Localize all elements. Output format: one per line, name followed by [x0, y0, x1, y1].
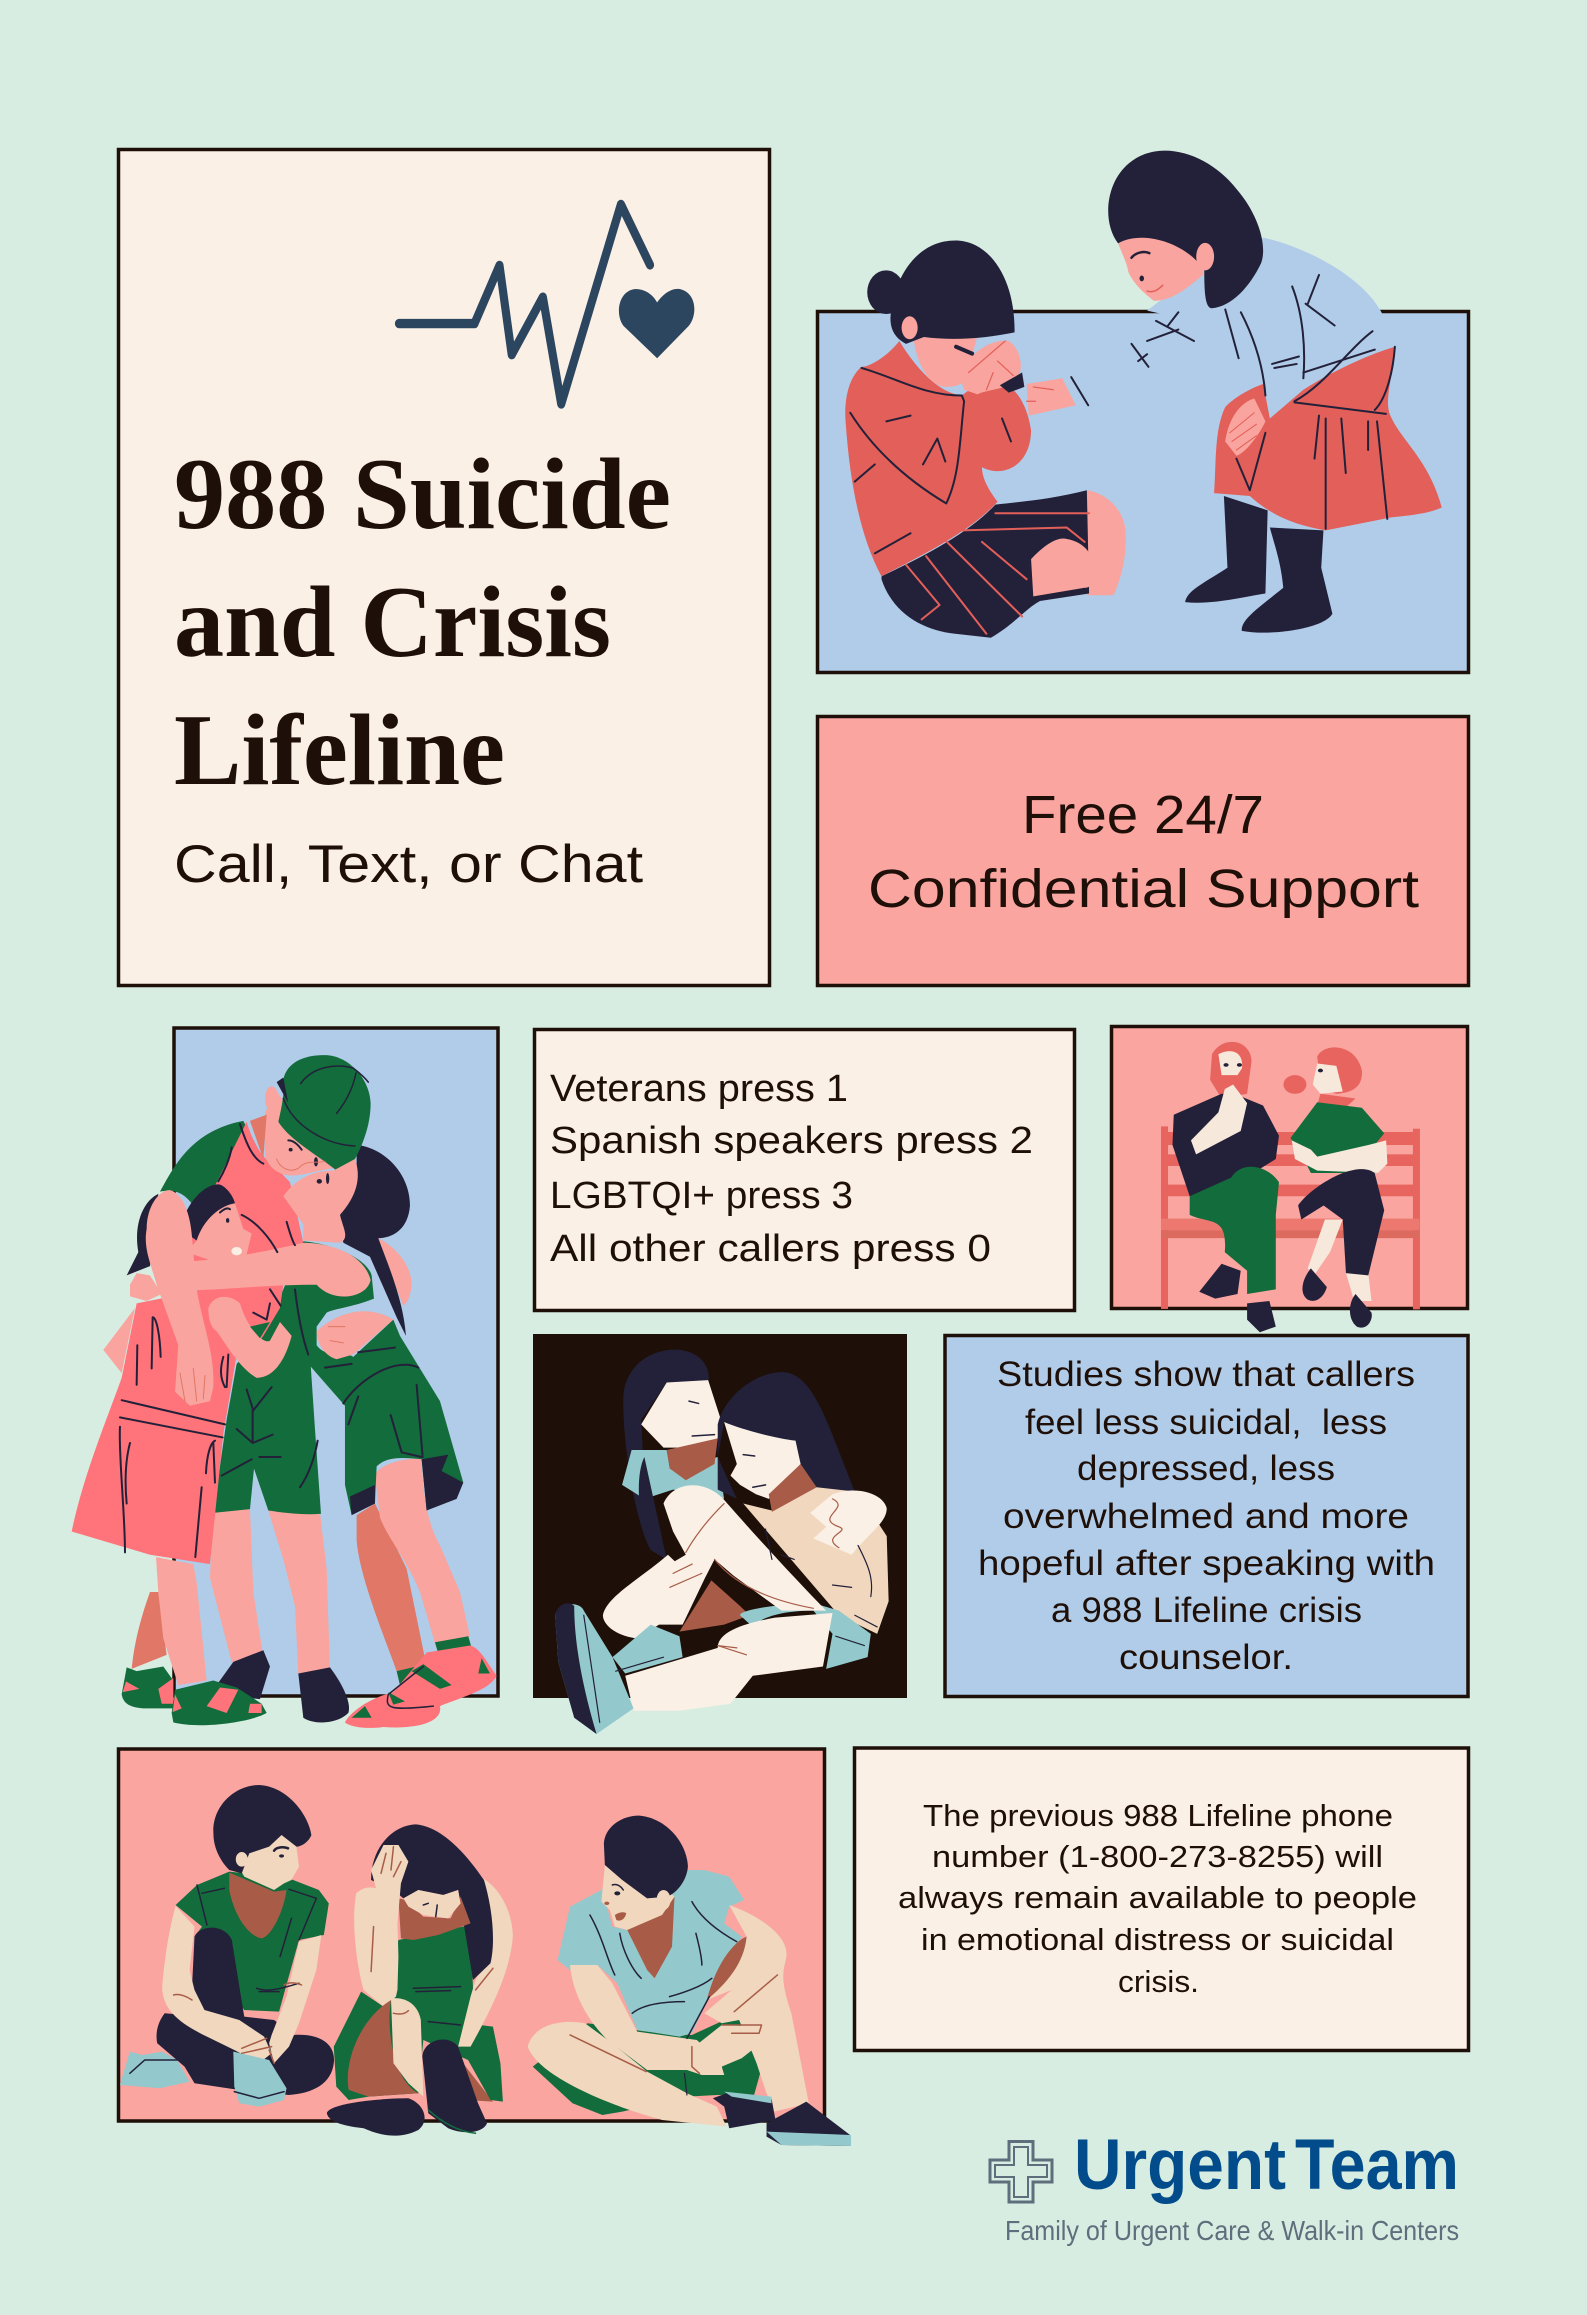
- icon: heartbeat line with heart: [399, 204, 694, 404]
- subtitle: Call, Text, or Chat: [174, 835, 643, 894]
- logo: Urgent Team: [990, 2126, 1459, 2246]
- panel: previous number note: number (1-800-273-8255) will: [932, 1839, 1383, 1874]
- figure: standing girl: [1108, 151, 1442, 633]
- panel: blue illustration backdrop: [818, 312, 1468, 672]
- panel: studies text: hopeful after speaking with: [978, 1544, 1435, 1583]
- kid: left: [120, 1785, 334, 2107]
- illustration: girl comforting crying girl: [845, 151, 1442, 638]
- panel: previous number note: in emotional distress or suicidal: [921, 1922, 1394, 1957]
- panel: free confidential support: [818, 716, 1468, 986]
- woman: [1283, 1047, 1387, 1328]
- title: [174, 438, 671, 807]
- panel: studies text: a 988 Lifeline crisis: [1051, 1591, 1362, 1630]
- panel: studies text: depressed, less: [1077, 1449, 1335, 1488]
- panel: pink bench backdrop: [1112, 1026, 1468, 1308]
- panel: free confidential support: Free 24/7: [1022, 785, 1264, 845]
- illustration: three people hugging: [72, 1055, 497, 1728]
- illustration: two girls embracing: [555, 1350, 889, 1734]
- illustration: couple on bench: [1161, 1042, 1420, 1332]
- logo wordmark: Team: [1295, 2126, 1459, 2205]
- panel: press options: Spanish speakers press 2: [550, 1120, 1033, 1162]
- title: Lifeline: [174, 694, 505, 807]
- panel: press options: [534, 1030, 1074, 1310]
- sandal: pink: [345, 1646, 497, 1728]
- panel: studies text: counselor.: [1119, 1638, 1293, 1677]
- panel: press options: All other callers press 0: [550, 1228, 991, 1270]
- panel: pink backdrop for sitting kids: [118, 1749, 824, 2121]
- panel: tall blue backdrop: [174, 1028, 498, 1696]
- panel: previous number note: The previous 988 Lifeline phone: [923, 1798, 1393, 1833]
- panel: studies text: [945, 1336, 1468, 1696]
- kid: middle: [327, 1824, 513, 2136]
- green dress: [283, 1241, 463, 1515]
- panel: previous number note: [854, 1748, 1468, 2050]
- man: [1172, 1042, 1279, 1332]
- figure: crying girl: [845, 241, 1126, 638]
- bench: [1161, 1126, 1420, 1309]
- panel: studies text: feel less suicidal, less: [1025, 1403, 1387, 1442]
- title: and Crisis: [174, 566, 611, 679]
- panel: title card: [118, 150, 770, 986]
- logo tagline: Family of Urgent Care & Walk-in Centers: [1005, 2215, 1459, 2246]
- panel: press options: LGBTQI+ press 3: [550, 1175, 853, 1217]
- panel: previous number note: crisis.: [1118, 1964, 1199, 1999]
- panel: previous number note: always remain available to people: [898, 1880, 1417, 1915]
- title: 988 Suicide: [174, 438, 671, 551]
- panel: studies text: Studies show that callers: [997, 1355, 1415, 1394]
- icon: cross outline: [990, 2142, 1052, 2202]
- kid: right: [528, 1816, 851, 2146]
- illustration: three kids sitting: [120, 1785, 851, 2146]
- logo wordmark: [1074, 2126, 1459, 2205]
- panel: studies text: overwhelmed and more: [1003, 1497, 1409, 1536]
- logo wordmark: Urgent: [1074, 2126, 1286, 2205]
- panel: press options: Veterans press 1: [550, 1068, 848, 1110]
- panel: black backdrop: [533, 1334, 907, 1698]
- panel: free confidential support: Confidential Support: [868, 859, 1419, 919]
- little girl: [132, 1592, 167, 1669]
